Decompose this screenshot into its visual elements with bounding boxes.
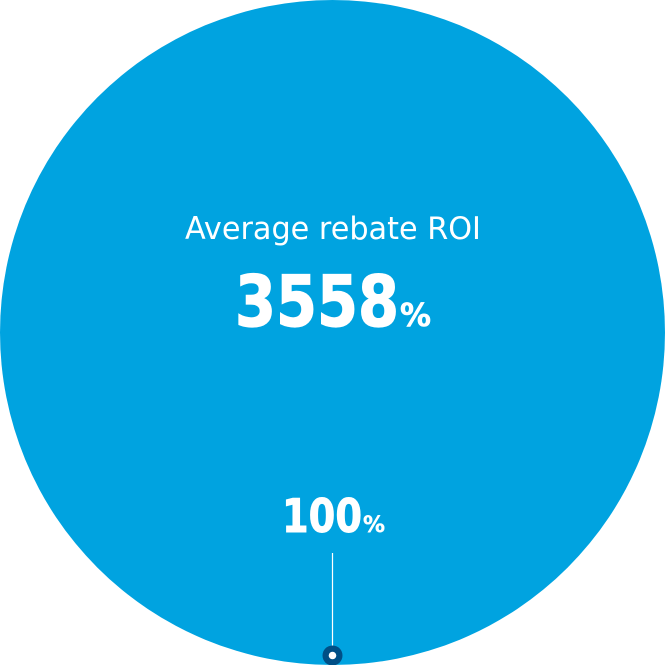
secondary value: 100%: % bbox=[363, 513, 385, 538]
marker: pointer line and dot bbox=[322, 553, 342, 665]
main value: 3558%: 3558 bbox=[235, 261, 399, 343]
secondary value: 100%: 100 bbox=[282, 489, 362, 543]
heading: Average rebate ROI: Average rebate ROI bbox=[185, 211, 481, 247]
main value: 3558%: % bbox=[400, 296, 431, 334]
